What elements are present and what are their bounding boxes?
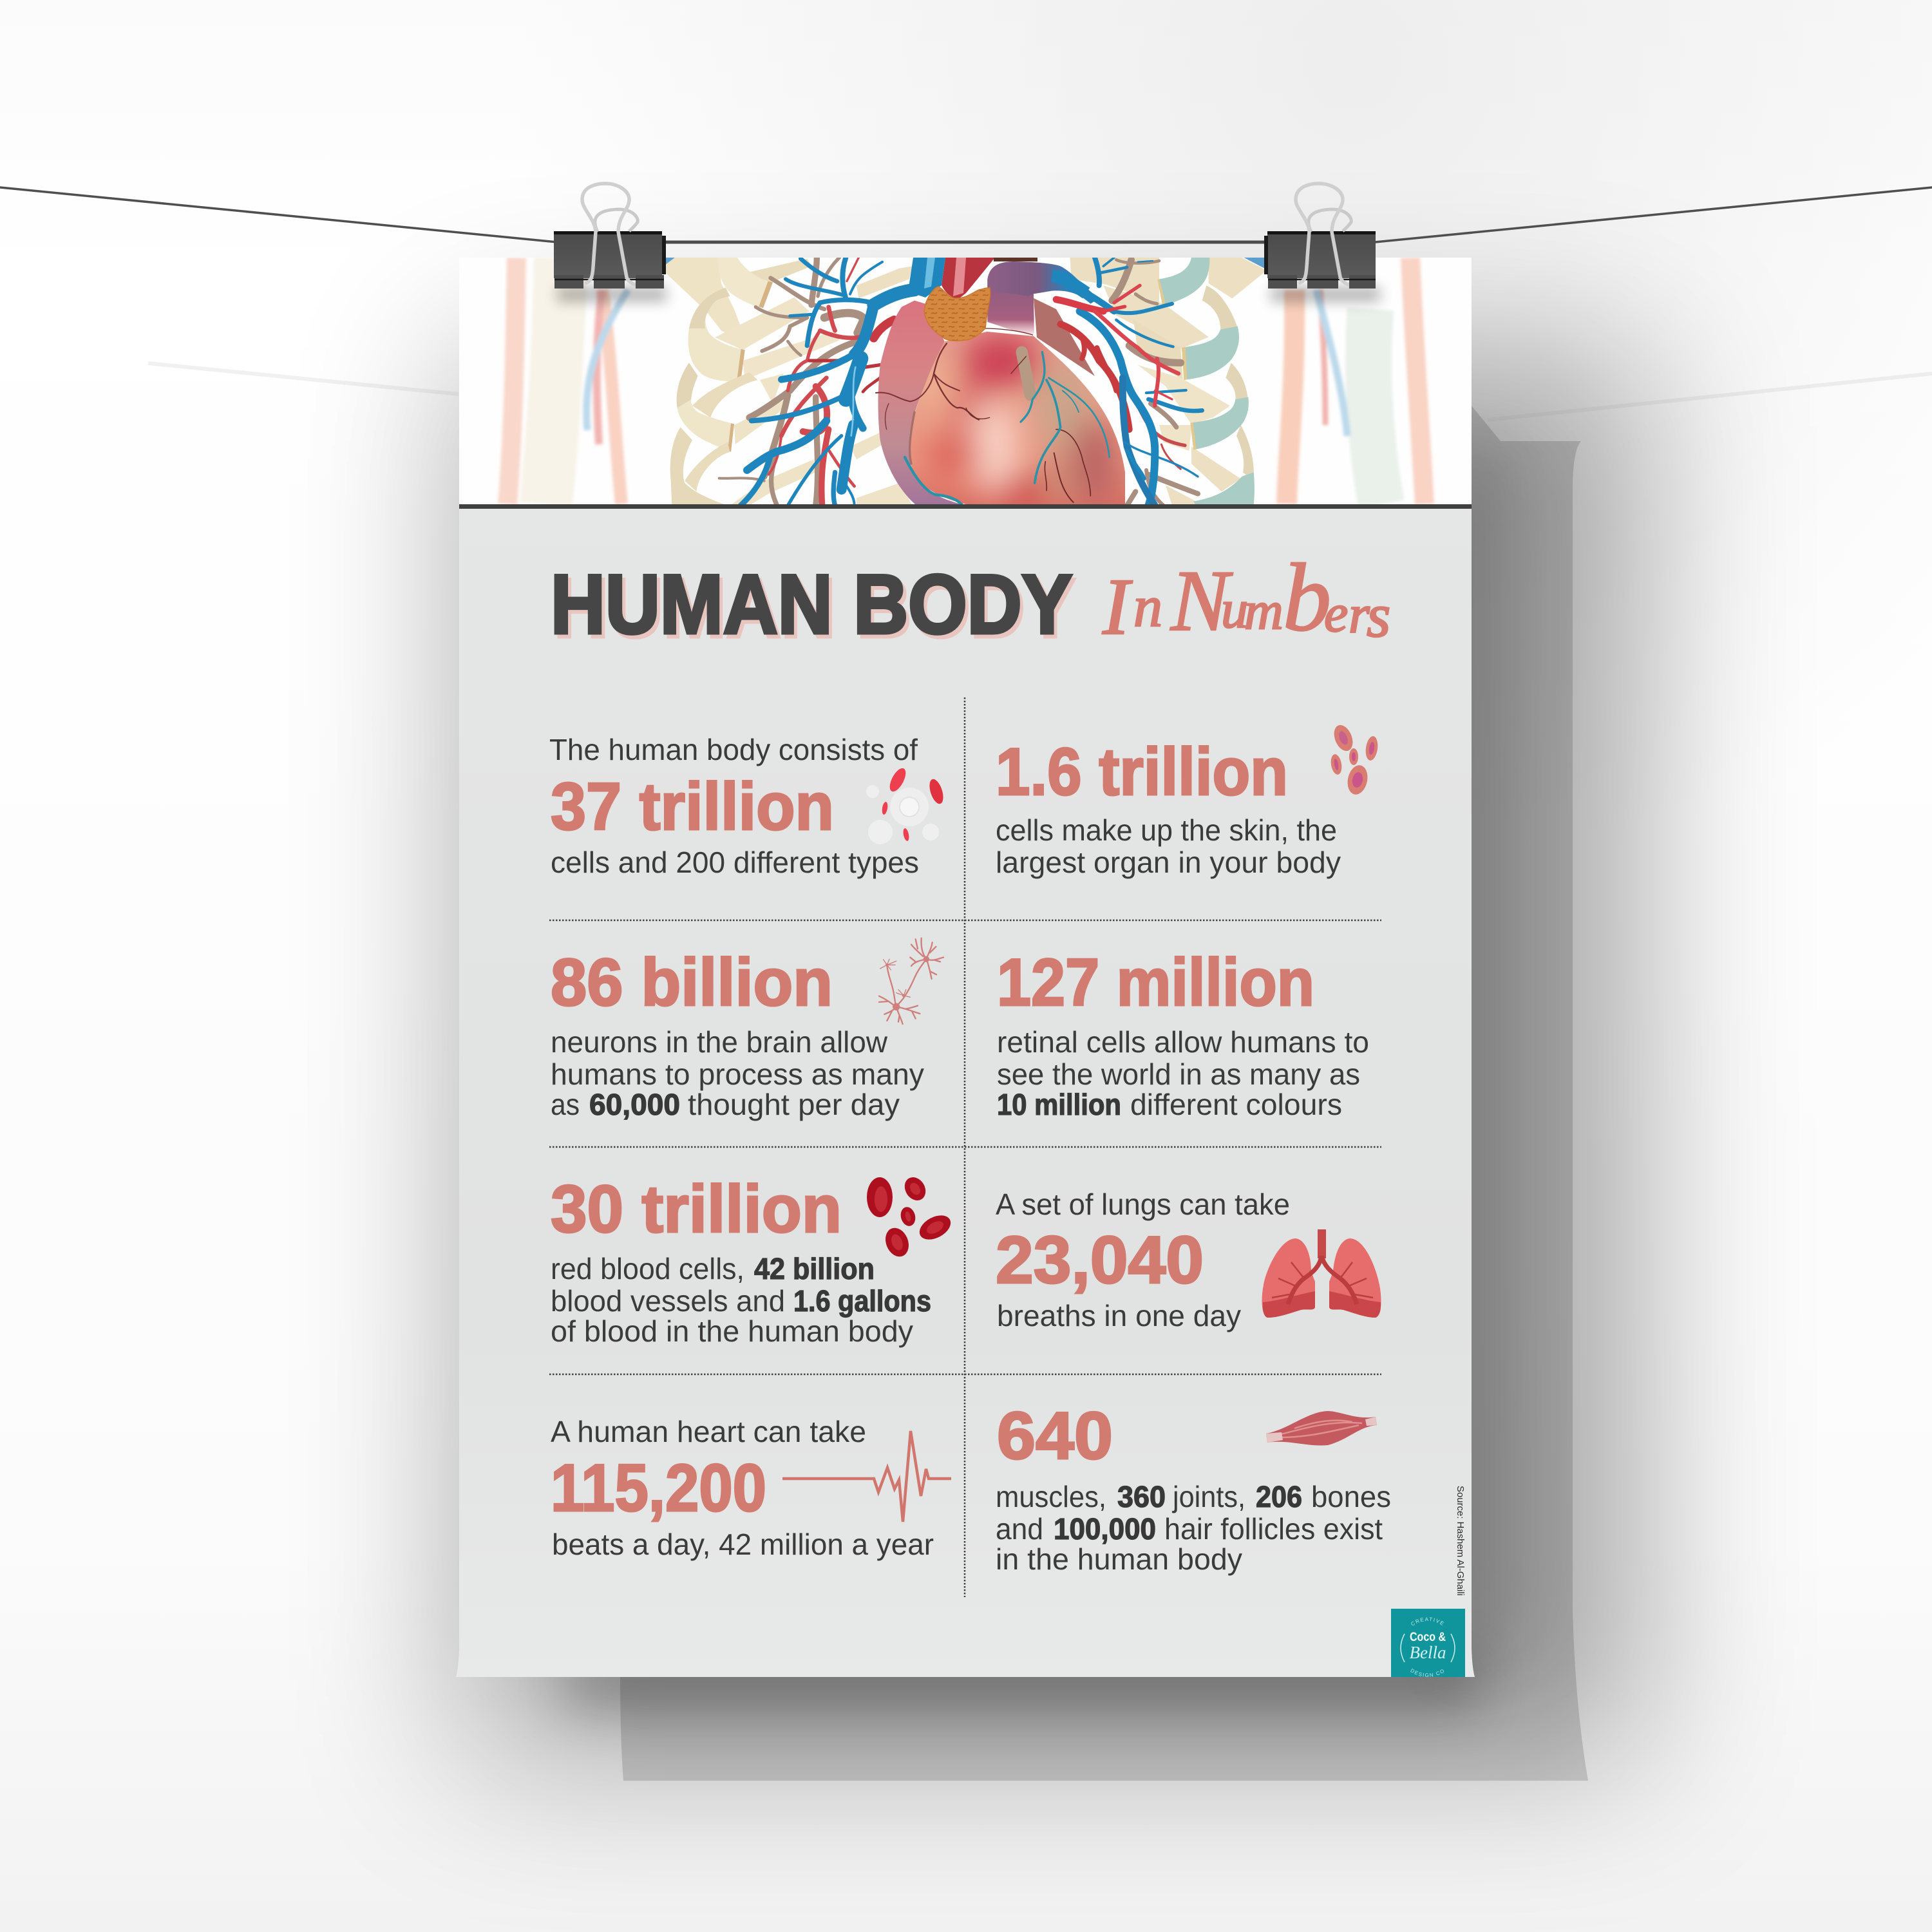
source credit: Source: Hashem Al-Ghaili (1455, 1486, 1466, 1596)
ribs right (1070, 256, 1269, 506)
title: HUMAN BODY: HUMAN BODY (554, 561, 1075, 655)
stat: 640 muscles: and (996, 1512, 1043, 1546)
thyroid gland (924, 287, 990, 341)
stat: 1.6 trillion skin cells: 1.6 trillion (996, 735, 1288, 810)
icon: skin cells (1329, 723, 1379, 797)
icon: mixed cells (866, 766, 946, 844)
grid dividers (549, 697, 1381, 1597)
stat: 127 million retinal cells: 10 million (997, 1088, 1121, 1121)
subtitle: In Numbers: b (1283, 544, 1331, 651)
ventricle (902, 322, 1133, 514)
stat: 115,200 heartbeats: beats a day, 42 million a year (552, 1528, 934, 1561)
title: HUMAN BODY: HUMAN BODY (551, 557, 1072, 651)
stat: 127 million retinal cells: see the world in as many as (997, 1057, 1360, 1091)
subtitle: In Numbers: N (1170, 553, 1233, 649)
stat: 640 muscles: 640 (997, 1399, 1113, 1473)
binder clip left (554, 184, 667, 302)
stat: 86 billion neurons: 60,000 (589, 1088, 680, 1121)
aorta (942, 258, 1037, 298)
subtitle: In Numbers: s (1367, 581, 1390, 650)
logo badge: Bella (1410, 1643, 1446, 1662)
stat: 37 trillion cells (549, 733, 919, 879)
icon: heartbeat line (782, 1431, 951, 1522)
pulmonary trunk (987, 261, 1099, 337)
stalk behind heart (1034, 298, 1095, 376)
icon: muscle (1266, 1411, 1377, 1445)
logo badge: Coco & (1410, 1631, 1446, 1644)
stat: 30 trillion red blood cells (551, 1172, 931, 1348)
bronchi left (719, 258, 864, 506)
stat: 127 million retinal cells: different colours (1130, 1088, 1342, 1121)
icon: neurons (879, 938, 943, 1024)
stat: 640 muscles: in the human body (996, 1542, 1242, 1576)
stat: 37 trillion cells: 37 trillion (551, 770, 834, 844)
stat: 115,200 heartbeats (551, 1415, 934, 1561)
stat: 640 muscles: joints, (1171, 1480, 1245, 1513)
stat: 23,040 breaths: 23,040 (996, 1223, 1204, 1298)
poster sheet (456, 258, 1475, 1677)
poster soft shadow (148, 348, 1932, 1781)
stat: 30 trillion red blood cells: 42 billion (754, 1252, 875, 1285)
stat: 640 muscles: 360 (1117, 1480, 1166, 1513)
stat: 30 trillion red blood cells: blood vessels and (551, 1284, 785, 1318)
stat: 115,200 heartbeats: A human heart can take (551, 1415, 866, 1448)
icon: lungs (1262, 1229, 1381, 1318)
stat: 23,040 breaths (996, 1188, 1290, 1332)
stat: 127 million retinal cells (997, 945, 1369, 1121)
subtitle: In Numbers: r (1349, 585, 1370, 645)
logo badge: CREATIVE (1411, 1617, 1444, 1625)
icon: red blood cells (867, 1173, 954, 1260)
stat: 86 billion neurons: humans to process as many (551, 1057, 924, 1091)
binder clip right (1264, 184, 1380, 302)
bronchi right (1112, 260, 1198, 506)
subtitle: In Numbers: u (1221, 580, 1248, 639)
stat: 1.6 trillion skin cells (996, 735, 1341, 879)
stat: 23,040 breaths: breaths in one day (997, 1299, 1241, 1332)
logo badge (1391, 1609, 1465, 1677)
header base rule (459, 504, 1472, 509)
hanging wire and rod (0, 187, 1932, 242)
stat: 37 trillion cells: cells and 200 different types (551, 846, 919, 879)
stat: 86 billion neurons: thought per day (688, 1088, 900, 1121)
right blood vessels (1052, 258, 1202, 506)
stat: 640 muscles (996, 1399, 1391, 1576)
stat: 86 billion neurons: as (551, 1088, 580, 1121)
stat: 640 muscles: bones (1311, 1480, 1391, 1513)
subtitle: In Numbers: I (1102, 563, 1133, 652)
stat: 30 trillion red blood cells: 1.6 gallons (793, 1284, 931, 1318)
stat: 30 trillion red blood cells: of blood in the human body (551, 1314, 913, 1348)
stat: 37 trillion cells: The human body consists of (549, 733, 918, 766)
right atrium (878, 301, 966, 506)
subtitle: In Numbers: e (1324, 583, 1348, 643)
stat: 23,040 breaths: A set of lungs can take (996, 1188, 1290, 1221)
stat: 115,200 heartbeats: 115,200 (551, 1451, 766, 1526)
subtitle: In Numbers: m (1244, 581, 1283, 641)
stat: 1.6 trillion skin cells: cells make up the skin, the (996, 813, 1337, 847)
superior vena cava (908, 258, 945, 298)
header illustration: heart and rib cage (459, 256, 1472, 514)
stat: 30 trillion red blood cells: 30 trillion (551, 1172, 842, 1247)
left blood vessels (741, 258, 914, 506)
coronary vessels (876, 328, 1110, 504)
subtitle: In Numbers: n (1133, 575, 1162, 639)
stat: 30 trillion red blood cells: red blood cells, (551, 1252, 744, 1285)
stat: 86 billion neurons (551, 945, 924, 1121)
stat: 640 muscles: hair follicles exist (1164, 1512, 1383, 1546)
stat: 127 million retinal cells: retinal cells allow humans to (997, 1025, 1369, 1059)
logo badge: DESIGN CO (1410, 1668, 1444, 1677)
stat: 127 million retinal cells: 127 million (997, 945, 1314, 1020)
stat: 86 billion neurons: 86 billion (551, 945, 833, 1020)
stat: 1.6 trillion skin cells: largest organ in your body (996, 846, 1341, 879)
stat: 86 billion neurons: neurons in the brain allow (551, 1025, 888, 1059)
arm stripes (507, 258, 1425, 504)
stat: 640 muscles: 100,000 (1054, 1512, 1156, 1546)
stat: 640 muscles: muscles, (996, 1480, 1106, 1513)
stat: 640 muscles: 206 (1256, 1480, 1302, 1513)
ribs left (644, 256, 913, 506)
